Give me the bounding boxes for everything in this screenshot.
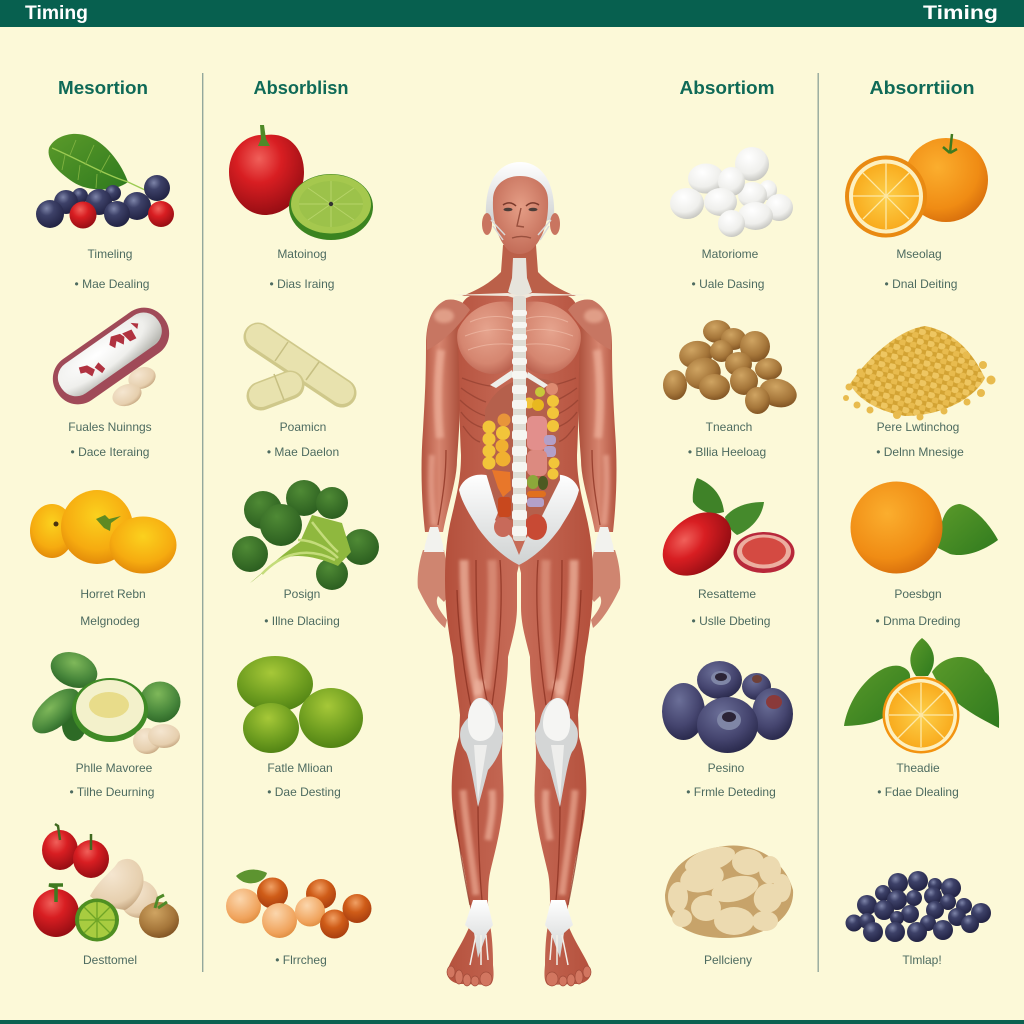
label: • Dace Iteraing xyxy=(71,445,149,459)
icon: white balls xyxy=(670,147,793,237)
label: • Dnal Deiting xyxy=(885,277,957,291)
label: Matoinog xyxy=(277,247,327,261)
label: Pellcieny xyxy=(704,953,752,967)
label: Horret Rebn xyxy=(80,587,146,601)
label: Fatle Mlioan xyxy=(267,761,333,775)
icon: large blueberries xyxy=(662,661,793,753)
icon: apple and lime xyxy=(229,125,373,240)
ear right xyxy=(550,213,560,235)
heading: column 2: Absorblisn xyxy=(254,77,348,98)
ear left xyxy=(482,213,492,235)
ribs xyxy=(460,378,492,442)
icon: oranges xyxy=(845,134,988,238)
label: Tlmlap! xyxy=(902,953,942,967)
label: • Dae Desting xyxy=(267,785,341,799)
panel: column 3 xyxy=(650,77,800,967)
header label right: Timing xyxy=(923,3,998,24)
label: Mseolag xyxy=(896,247,942,261)
icon: yellow fruits xyxy=(30,490,176,574)
icon: walnut xyxy=(665,842,793,938)
shoulder deltoid xyxy=(427,299,470,350)
icon: cucumbers xyxy=(24,646,181,754)
label: Matoriome xyxy=(702,247,759,261)
white cap xyxy=(486,162,554,222)
label: Pere Lwtinchog xyxy=(877,420,959,434)
muscle shading xyxy=(431,350,493,895)
label: • Illne Dlaciing xyxy=(264,614,340,628)
label: Melgnodeg xyxy=(80,614,140,628)
label: Timeling xyxy=(88,247,132,261)
toes xyxy=(447,966,492,986)
top header bar xyxy=(0,0,1024,27)
icon: broccoli xyxy=(232,480,379,590)
label: Pesino xyxy=(708,761,745,775)
right half of body xyxy=(519,288,620,986)
nose and mouth xyxy=(512,208,531,238)
icon: mixed fruit xyxy=(33,824,179,942)
icon: yellow grains xyxy=(843,326,996,420)
label: • Fdae Dlealing xyxy=(877,785,959,799)
label: Posign xyxy=(284,587,320,601)
icon: brown beans xyxy=(663,320,800,414)
label: Poesbgn xyxy=(894,587,942,601)
icon: pale capsules xyxy=(258,336,342,400)
eye left xyxy=(504,208,512,211)
ankle joint xyxy=(465,900,493,965)
label: • Delnn Mnesige xyxy=(876,445,964,459)
neck spine xyxy=(508,258,532,296)
face xyxy=(493,176,548,254)
heading: column 4: Absorrtiion xyxy=(870,77,974,98)
label: • Uale Dasing xyxy=(692,277,764,291)
eye right xyxy=(528,208,538,211)
pelvis wing xyxy=(459,475,519,565)
label: Phlle Mavoree xyxy=(76,761,153,775)
heading: column 1: Mesortion xyxy=(58,77,148,98)
left half of body xyxy=(418,288,519,986)
knee joint xyxy=(460,698,503,807)
label: Tneanch xyxy=(706,420,752,434)
label: • Uslle Dbeting xyxy=(692,614,770,628)
label: Resatteme xyxy=(698,587,756,601)
icon: red fruit and leaves xyxy=(650,478,794,589)
icon: orange and leaf xyxy=(850,482,998,574)
neck xyxy=(462,245,576,296)
label: Desttomel xyxy=(83,953,137,967)
cheek strands xyxy=(491,220,551,240)
icon: capsule xyxy=(43,298,179,414)
left torso and leg xyxy=(445,288,519,985)
icon: orange slice and leaves xyxy=(844,638,999,754)
label: • Tilhe Deurning xyxy=(70,785,154,799)
panel: column 2 xyxy=(226,77,379,967)
label: • Mae Daelon xyxy=(267,445,339,459)
label: • Flrrcheg xyxy=(275,953,327,967)
label: • Bllia Heeloag xyxy=(688,445,766,459)
label: Theadie xyxy=(896,761,940,775)
wrist band xyxy=(424,527,444,552)
label: • Frmle Deteding xyxy=(686,785,776,799)
clavicles xyxy=(452,293,588,300)
panel: column 4 xyxy=(843,77,999,967)
header label left: Timing xyxy=(25,3,88,24)
chest muscle xyxy=(457,301,517,374)
human anatomy figure xyxy=(418,162,620,986)
spine xyxy=(512,296,527,541)
label: • Dnma Dreding xyxy=(876,614,960,628)
left arm xyxy=(422,300,461,532)
icon: leaf and berries xyxy=(36,134,174,228)
head xyxy=(482,162,560,254)
label: • Dias Iraing xyxy=(270,277,334,291)
label: • Mae Dealing xyxy=(75,277,149,291)
label: Fuales Nuinngs xyxy=(68,420,152,434)
icon: orange berries xyxy=(226,870,372,938)
left hand xyxy=(418,550,448,628)
panel: column 1 xyxy=(24,77,181,967)
intestines xyxy=(482,378,560,540)
white rib bars xyxy=(490,370,548,388)
icon: small dark berries xyxy=(846,871,991,942)
label: Poamicn xyxy=(280,420,326,434)
bottom bar xyxy=(0,1020,1024,1024)
heading: column 3: Absortiom xyxy=(680,77,774,98)
eyes and brows xyxy=(503,203,539,206)
icon: green fruits xyxy=(237,656,363,753)
